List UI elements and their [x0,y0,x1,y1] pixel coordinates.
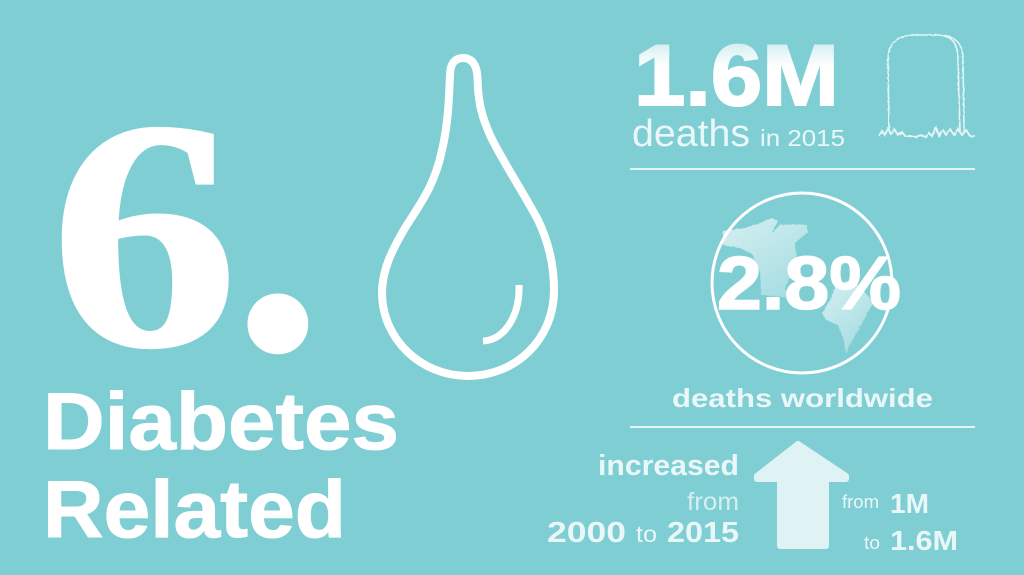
label: 2000 to 2015 [547,517,739,549]
label: deaths: deaths [632,113,750,155]
south america [822,281,873,353]
divider [630,426,975,428]
label: from: from [687,488,739,516]
icon: up arrow [757,444,846,546]
stat: 1.6M: 1.6M [634,28,839,124]
drop outline [382,58,554,376]
rank number [50,16,325,431]
label: in 2015: in 2015 [760,125,845,151]
label: to: to [864,533,880,553]
value: 1M: 1M [890,488,929,519]
title [43,377,399,555]
label: from: from [842,492,879,512]
gravestone outline [888,35,960,131]
north america [723,218,808,298]
gravestone side [940,35,964,131]
grass [879,128,975,137]
title line one: Diabetes [43,377,399,467]
drop highlight [483,285,519,341]
icon: water drop [382,58,554,376]
numeral six: 6 [50,54,239,416]
year 2015: 2015 [667,517,739,549]
panel: deaths in 2015 [630,28,975,155]
title line two: Related [43,465,346,555]
icon: gravestone [879,35,975,137]
word to: to [636,521,657,547]
globe outline [712,193,892,373]
divider [630,168,975,170]
year 2000: 2000 [547,517,626,549]
label: deaths worldwide: deaths worldwide [672,383,933,413]
panel: deaths worldwide [672,193,933,413]
stat: 2.8%: 2.8% [717,241,901,325]
period: . [231,16,325,431]
value: 1.6M: 1.6M [890,525,958,556]
icon: globe [712,193,892,373]
label: increased: increased [598,450,739,482]
panel: increase 2000 to 2015 [547,444,958,556]
